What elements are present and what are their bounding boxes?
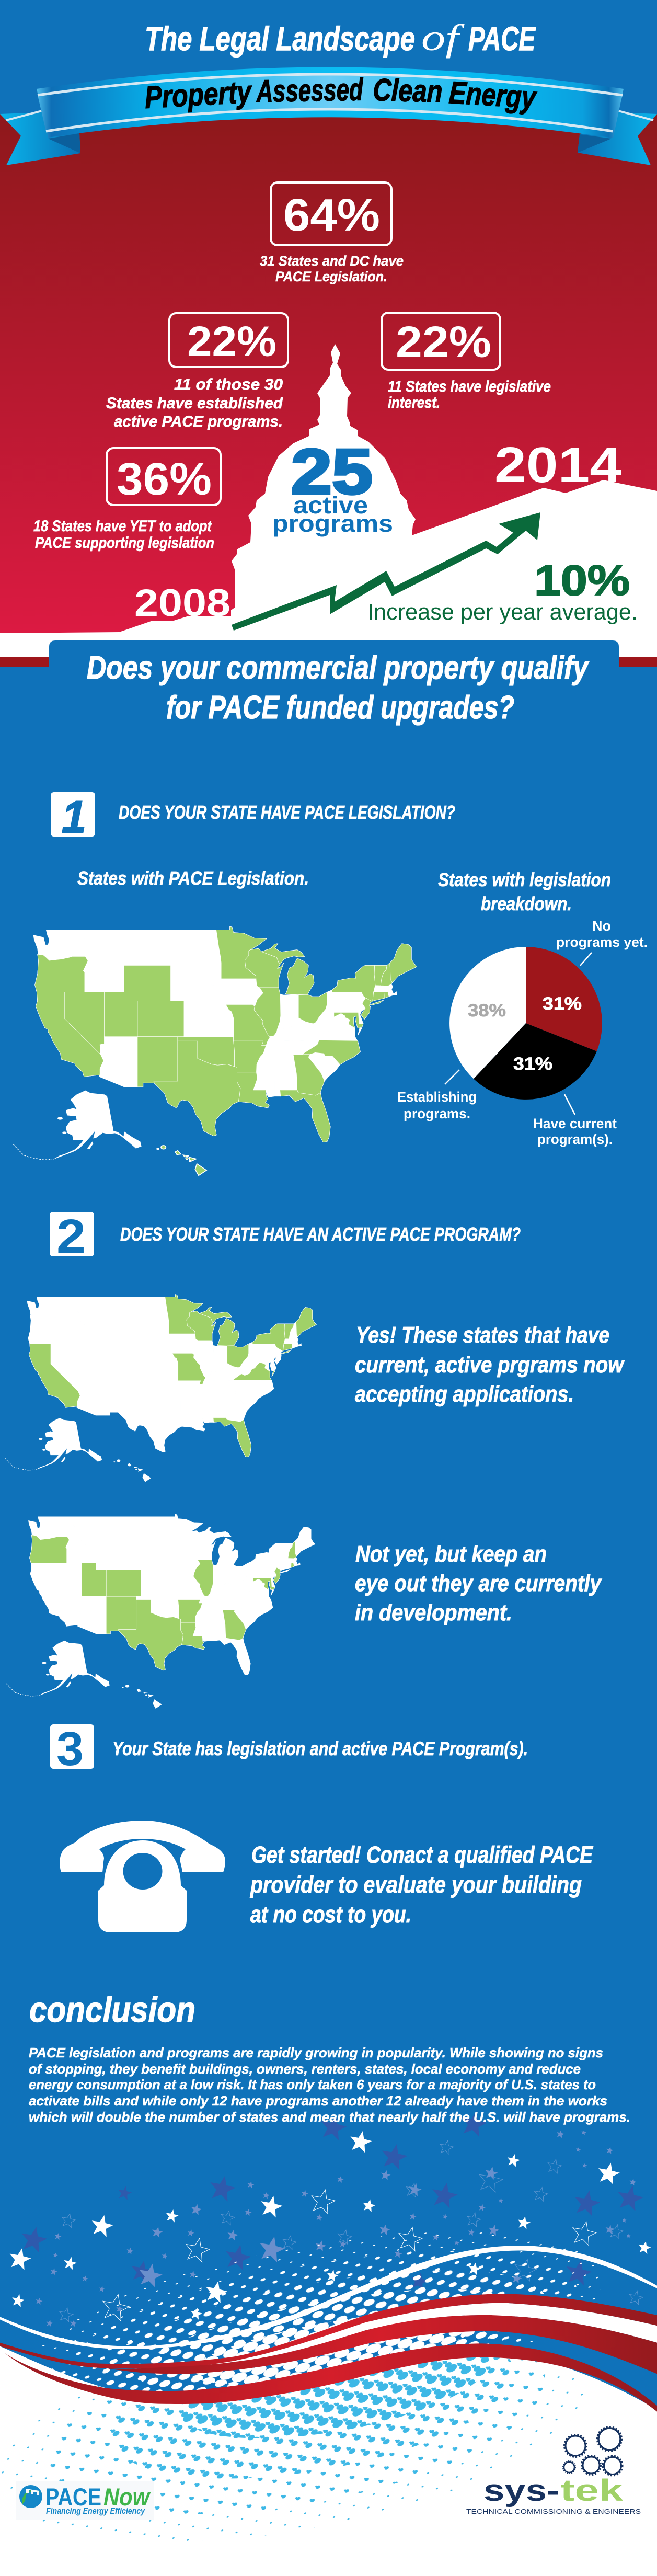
text line: at no cost to you. [250,1901,411,1928]
telephone handset [60,1821,225,1872]
logo backing [16,2481,154,2520]
map 3 contiguous states [29,1514,315,1675]
title: PACE: PACE [468,20,536,58]
ribbon tail folds [48,133,612,153]
map 2: active programs [5,1295,316,1482]
paragraph line: of stopping, they benefit buildings, owners, renters, states, local economy and reduce [29,2061,581,2077]
pie chart heading [438,869,611,914]
stat caption line 2: States have established [106,395,283,412]
footer graphic: stars and waves [0,2109,657,2576]
halftone dots over blue [11,2196,616,2457]
gear ring 5 [603,2456,622,2475]
in-development text [355,1541,602,1625]
red stripe 1 [0,2294,657,2368]
pie value black: 31% [513,1054,552,1074]
gear ring 3 [563,2461,575,2473]
pie heading line 1: States with legislation [438,869,611,890]
ribbon right tail [578,112,657,165]
number 25: 25 [291,436,373,507]
white lower area [0,2346,657,2576]
logo globe [19,2485,42,2508]
icon: telephone [60,1821,225,1932]
step 2 number: 2 [56,1210,86,1263]
ribbon word Energy: Energy [448,75,538,116]
map 1 contiguous states [33,926,417,1142]
stat value: 64% [283,190,380,241]
pie label: Have current programs [533,1116,617,1147]
step 1 badge [51,792,95,837]
step 3 badge [50,1724,94,1769]
map 3 green states [29,1535,297,1670]
sys-tek tagline: TECHNICAL COMMISSIONING & ENGINEERS [466,2508,641,2515]
pie leader lines [445,953,592,1115]
sys word: sys- [483,2474,559,2508]
stat value: 22% [396,317,491,367]
stat caption: 11 of those 30 [174,376,283,393]
logo green arc [22,2490,42,2504]
gears [563,2427,622,2475]
heading tab [49,640,619,732]
stat caption line 2: interest. [388,394,440,411]
step 2 question: DOES YOUR STATE HAVE AN ACTIVE PACE PROGRAM? [120,1223,521,1245]
pie slice: no programs yet [526,947,602,1051]
gear ring 2 [597,2427,621,2451]
halftone dots on white [1,2357,586,2541]
pie heading line 2: breakdown. [481,893,572,914]
ribbon text [144,72,538,116]
waving stripes [0,2246,657,2412]
growth caption: Increase per year average. [367,599,638,625]
stat caption: 18 States have YET to adopt [33,518,213,535]
logo: sys-tek [466,2427,641,2515]
panel: red hero background [0,114,657,633]
logo skyline [26,2489,39,2496]
stat value: 22% [187,318,276,365]
text line: accepting applications. [355,1381,574,1407]
stat value: 36% [117,454,212,505]
stat: 22% active programs [106,313,288,430]
active programs text [355,1322,625,1407]
logo tagline: Financing Energy Efficiency [46,2506,145,2516]
text line: Yes! These states that have [356,1322,609,1348]
pie slice: establishing programs [449,947,526,1079]
map heading: States with PACE Legislation. [77,867,309,889]
ribbon stripes [38,74,623,131]
growth value: 10% [534,557,630,604]
ribbon tail stripes [6,111,653,120]
text line: provider to evaluate your building [250,1871,582,1898]
stat caption: 31 States and DC have [260,253,404,269]
map 3 Alaska and Hawaii [6,1641,162,1709]
pie value red: 31% [543,994,582,1014]
year label 2014: 2014 [494,437,621,493]
step 1 number: 1 [62,792,86,842]
dark blue stars [19,2109,646,2291]
pie label: No programs yet [556,918,648,950]
pie chart: legislation breakdown [397,918,648,1147]
white solid stars [7,2128,652,2320]
heading line 2: for PACE funded upgrades? [166,690,514,726]
paragraph line: energy consumption at a low risk. It has only taken 6 years for a majority of U.S. states to [29,2077,596,2092]
paragraph line: PACE legislation and programs are rapidly growing in popularity. While showing no signs [29,2045,603,2060]
ribbon word Assessed: Assessed [256,72,364,109]
stat: 36% [33,448,221,552]
pie label: Establishing programs [397,1089,477,1121]
map 1 Alaska [13,1091,142,1160]
map 2 green states [29,1295,316,1457]
tek word: tek [560,2474,624,2508]
text line: in development. [355,1600,512,1625]
text line: Get started! Conact a qualified PACE [251,1841,594,1868]
label line: No [592,918,611,934]
stat box [382,313,500,370]
map 1: states with legislation [13,926,417,1175]
capitol dome and rising hill silhouette [0,344,657,657]
divider red stripe [0,657,657,667]
label line: Have current [533,1116,617,1131]
paragraph line: activate bills and while only 12 have programs another 12 already have them in the works [29,2093,607,2109]
step 1 header [51,792,455,842]
gear ring 4 [582,2456,601,2475]
stat caption line 3: active PACE programs. [114,413,283,430]
red stripe 2 [105,2315,657,2374]
ribbon word Property: Property [144,74,253,115]
title: main words: The Legal Landscape [145,20,415,58]
step 3 number: 3 [56,1722,84,1776]
step 2 header [50,1210,521,1263]
stat box [107,448,221,505]
text line: current, active prgrams now [355,1352,625,1378]
year label 2008: 2008 [134,582,230,624]
step 1 question: DOES YOUR STATE HAVE PACE LEGISLATION? [119,802,455,823]
stat box [271,182,391,245]
ribbon word Clean: Clean [373,72,443,109]
ribbon left tail [0,112,80,165]
stat caption line 2: PACE supporting legislation [35,534,214,552]
ribbon banner [0,67,657,165]
conclusion paragraph [29,2045,630,2125]
title: script of: of [421,17,465,59]
step 3 header [50,1722,528,1776]
telephone base [98,1840,187,1932]
capitol label: 25 active programs [272,436,393,537]
light blue stars [35,2130,637,2327]
white swoosh [0,2246,657,2349]
ribbon inner light band [38,74,623,131]
label line: Establishing [397,1089,477,1105]
gear ring 1 [564,2435,586,2457]
stat: 22% legislative interest [382,313,551,411]
map 1 Hawaii [157,1146,206,1175]
stat caption line 2: PACE Legislation. [275,269,387,284]
label line: programs. [404,1106,470,1121]
word active: active [293,491,368,519]
get started text [250,1841,594,1928]
text line: Not yet, but keep an [355,1541,547,1567]
ribbon band [37,67,624,138]
title [145,17,536,59]
growth arrow [232,512,540,631]
pie slice: have current programs [474,1023,597,1100]
logo word PACE: PACE [45,2483,101,2511]
label line: program(s). [537,1131,613,1147]
logo: PACENow [16,2481,154,2520]
conclusion heading: conclusion [29,1990,195,2030]
growth stat [367,557,638,625]
step 2 badge [50,1212,94,1256]
stat: 64% [260,182,404,284]
map 2 Alaska and Hawaii [5,1418,151,1482]
text line: eye out they are currently [355,1571,602,1596]
faint outline stars [57,2139,644,2322]
map 2 contiguous states [27,1295,316,1457]
outline stars [100,2188,598,2322]
map 3: programs in development [6,1514,315,1709]
stat caption: 11 States have legislative [388,378,551,395]
red stripe 3 [5,2343,657,2412]
heading panel: qualify question [49,640,619,732]
map 1 green states [35,926,417,1142]
label line: programs yet. [556,934,648,950]
stat box [169,313,288,367]
step 3 statement: Your State has legislation and active PACE Program(s). [112,1738,528,1759]
white stripe between reds [143,2303,657,2368]
paragraph line: which will double the number of states and mean that nearly half the U.S. will have programs. [29,2109,630,2125]
word programs: programs [272,510,393,537]
pie value white: 38% [468,1001,506,1021]
logo word Now: Now [103,2483,151,2511]
